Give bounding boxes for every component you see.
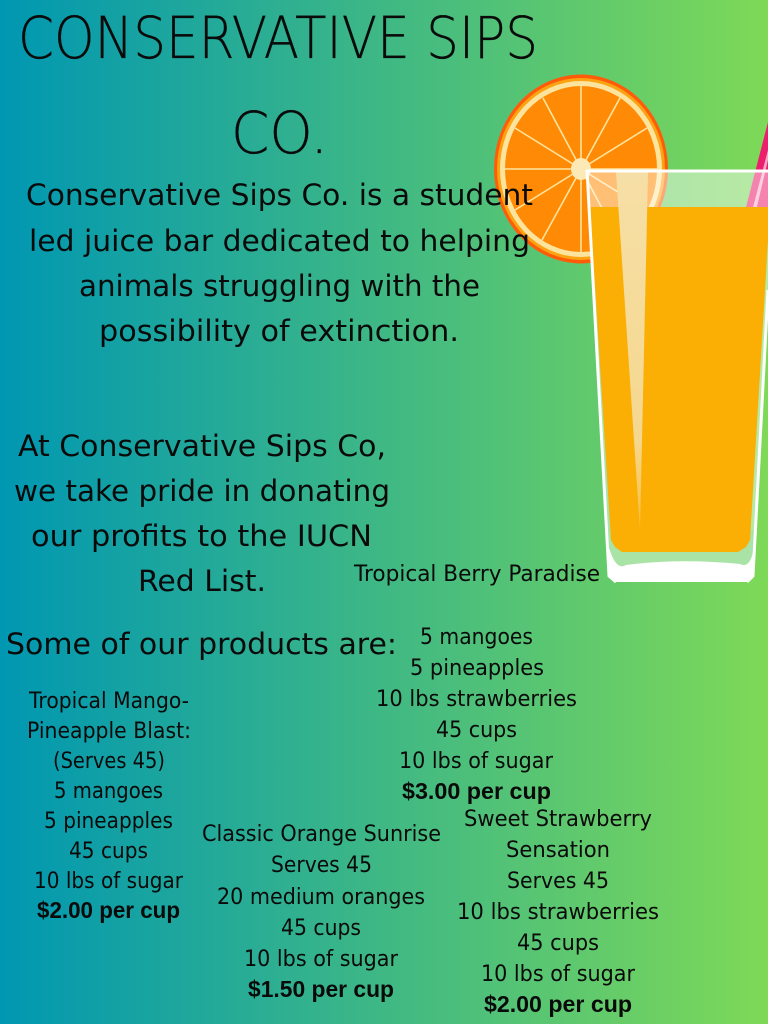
product: Classic Orange Sunrise xyxy=(202,822,441,1002)
product: Sweet Strawberry Sensation: 10 lbs of sugar xyxy=(481,962,636,987)
text block: mission statement: led juice bar dedicated to helping xyxy=(29,224,530,258)
product: Sweet Strawberry Sensation xyxy=(457,807,659,1017)
icon: pink straw xyxy=(744,122,768,215)
text block: donation statement: Red List. xyxy=(138,564,266,598)
product: Tropical Mango-Pineapple Blast: $2.00 per cup xyxy=(37,897,180,923)
product: Tropical Mango-Pineapple Blast: 10 lbs of sugar xyxy=(34,869,184,894)
title xyxy=(18,4,538,167)
text block: mission statement: animals struggling with the xyxy=(79,269,480,303)
product: Classic Orange Sunrise: Classic Orange Sunrise xyxy=(202,822,441,847)
product: Tropical Berry Paradise: 5 mangoes xyxy=(420,625,533,650)
product: Sweet Strawberry Sensation: $2.00 per cup xyxy=(484,991,632,1017)
product: Sweet Strawberry Sensation: Sensation xyxy=(506,838,610,863)
product: Tropical Mango-Pineapple Blast: 45 cups xyxy=(69,839,148,864)
product: Tropical Berry Paradise: Tropical Berry Paradise xyxy=(353,562,600,587)
illustration: orange slice and juice glass xyxy=(494,74,768,582)
product: Tropical Berry Paradise: $3.00 per cup xyxy=(402,778,551,804)
product: Tropical Mango-Pineapple Blast: 5 pineapples xyxy=(44,809,173,834)
icon: orange slice xyxy=(494,74,668,264)
text block: donation statement: we take pride in donating xyxy=(14,474,390,508)
product: Tropical Mango-Pineapple Blast: Pineapple Blast: xyxy=(27,719,191,744)
product: Tropical Berry Paradise: 10 lbs strawberries xyxy=(376,687,577,712)
product: Tropical Berry Paradise: 5 pineapples xyxy=(410,656,544,681)
product: Classic Orange Sunrise: 20 medium oranges xyxy=(217,885,425,910)
icon: juice glass xyxy=(586,170,768,582)
product: Sweet Strawberry Sensation: 10 lbs strawberries xyxy=(457,900,659,925)
title: CONSERVATIVE SIPS xyxy=(18,4,538,72)
text block: mission statement xyxy=(26,178,533,348)
product: Classic Orange Sunrise: 45 cups xyxy=(281,916,361,941)
text block: donation statement: At Conservative Sips Co, xyxy=(18,429,386,463)
text block: donation statement xyxy=(14,429,390,598)
product: Tropical Mango-Pineapple Blast: Tropical Mango- xyxy=(28,689,189,714)
product: Tropical Berry Paradise: 45 cups xyxy=(436,718,517,743)
product: Tropical Mango-Pineapple Blast: (Serves 45) xyxy=(53,749,165,774)
product: Tropical Berry Paradise: 10 lbs of sugar xyxy=(399,749,554,774)
product: Sweet Strawberry Sensation: 45 cups xyxy=(517,931,599,956)
product: Classic Orange Sunrise: Serves 45 xyxy=(271,853,372,878)
product: Classic Orange Sunrise: $1.50 per cup xyxy=(248,976,394,1002)
text block: mission statement: Conservative Sips Co. is a student xyxy=(26,178,533,212)
text block: mission statement: possibility of extinction. xyxy=(99,314,459,348)
heading: products intro: Some of our products are: xyxy=(6,627,397,661)
title: CO. xyxy=(231,99,328,167)
product: Sweet Strawberry Sensation: Serves 45 xyxy=(507,869,609,894)
product: Classic Orange Sunrise: 10 lbs of sugar xyxy=(244,947,399,972)
text block: donation statement: our profits to the IUCN xyxy=(31,519,372,553)
product: Tropical Mango-Pineapple Blast xyxy=(27,689,191,923)
product: Sweet Strawberry Sensation: Sweet Strawberry xyxy=(464,807,652,832)
product: Tropical Mango-Pineapple Blast: 5 mangoes xyxy=(54,779,163,804)
product: Tropical Berry Paradise xyxy=(353,562,600,804)
